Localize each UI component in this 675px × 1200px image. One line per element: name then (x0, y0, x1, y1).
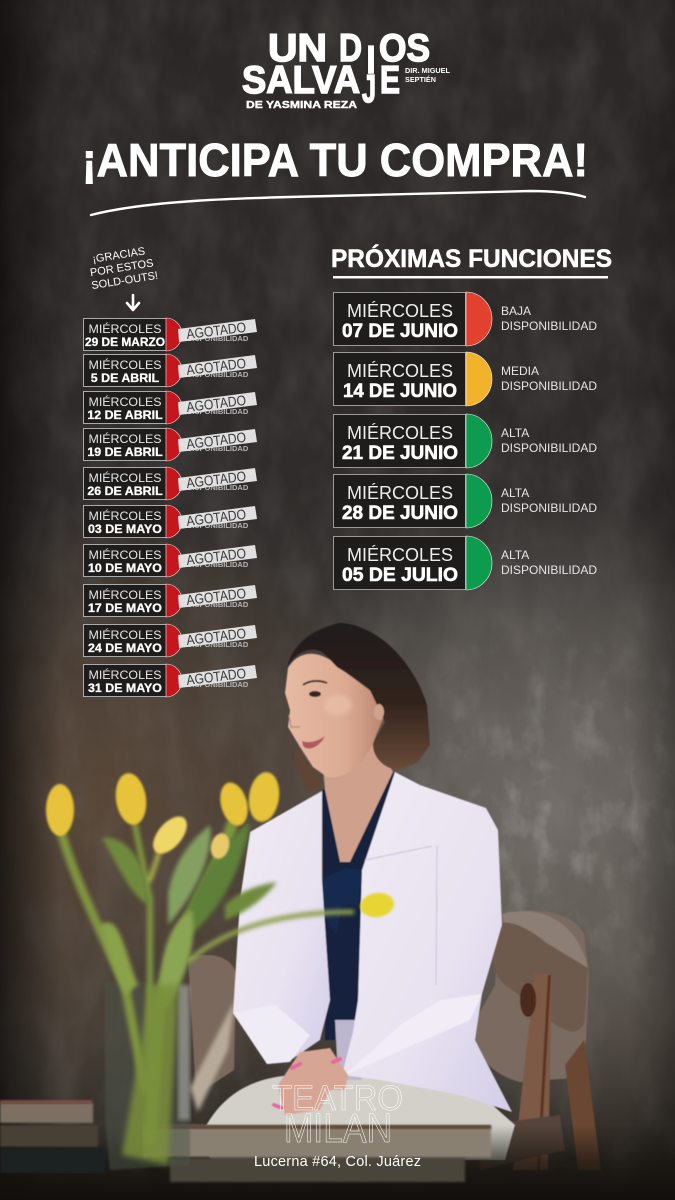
sold out date: 29 de marzo: AGOTADO (185, 319, 247, 342)
sold out date: 19 de abril: AGOTADO (185, 429, 247, 452)
sold out date: 24 de mayo: 24 DE MAYO (88, 641, 162, 655)
shirt (322, 772, 400, 1040)
upcoming date: 05 de julio, alta (334, 536, 597, 590)
upcoming date: 07 de junio, baja (334, 292, 597, 346)
trousers (205, 1072, 515, 1160)
sold out date: 26 de abril: DISPONIBILIDAD (187, 483, 249, 492)
sold out date: 10 de mayo (84, 544, 257, 577)
sold out date: 17 de mayo: DISPONIBILIDAD (187, 600, 249, 609)
sold out date: 26 de abril: 26 DE ABRIL (87, 484, 163, 498)
venue logo: Teatro Milan: MILAN (284, 1105, 392, 1151)
sold out date: 10 de mayo: DISPONIBILIDAD (187, 560, 249, 569)
sold out date: 31 de mayo (84, 664, 257, 697)
sold out date: 5 de abril: DISPONIBILIDAD (187, 370, 249, 379)
logo: Un Dios Salvaje: E (380, 59, 400, 102)
sold out date: 19 de abril: DISPONIBILIDAD (187, 444, 249, 453)
upcoming date: 05 de julio, alta: DISPONIBILIDAD (501, 563, 597, 577)
logo: Un Dios Salvaje (242, 27, 451, 111)
upcoming date: 05 de julio, alta: ALTA (501, 548, 529, 562)
upcoming date: 28 de junio, alta: 28 DE JUNIO (342, 502, 458, 524)
sold out date: 19 de abril: MIÉRCOLES (89, 431, 161, 446)
photo: tulips in vase (46, 770, 396, 1170)
logo: Un Dios Salvaje: OS (379, 27, 430, 70)
sold out date: 29 de marzo: MIÉRCOLES (89, 321, 161, 336)
sold out date: 26 de abril: MIÉRCOLES (89, 470, 161, 485)
sold out date: 03 de mayo: DISPONIBILIDAD (187, 521, 249, 530)
logo credit: director: SEPTIÉN (405, 75, 436, 84)
upcoming date: 21 de junio, alta (334, 414, 597, 468)
logo credit: author: DE YASMINA REZA (246, 99, 357, 111)
sold out date: 31 de mayo: MIÉRCOLES (89, 667, 161, 682)
sold out date: 12 de abril: MIÉRCOLES (89, 394, 161, 409)
upcoming date: 05 de julio, alta: MIÉRCOLES (347, 545, 453, 565)
upcoming date: 14 de junio, media (334, 352, 597, 406)
blooms (46, 770, 396, 919)
sold out date: 5 de abril: AGOTADO (185, 355, 247, 378)
thanks note: POR ESTOS (89, 257, 154, 279)
upcoming date: 07 de junio, baja: 07 DE JUNIO (342, 320, 458, 342)
sold out date: 5 de abril (84, 354, 257, 387)
upcoming date: 14 de junio, media: DISPONIBILIDAD (501, 379, 597, 393)
sold out date: 26 de abril: AGOTADO (185, 468, 247, 491)
logo: Un Dios Salvaje: SALVA (242, 59, 360, 102)
hands (278, 1048, 348, 1115)
photo: chair (188, 910, 601, 1170)
bow (310, 868, 362, 935)
sold out date: 31 de mayo: DISPONIBILIDAD (187, 680, 249, 689)
sold out date: 26 de abril (84, 467, 257, 500)
venue logo: Teatro Milan: TEATRO (272, 1079, 403, 1118)
sold out date: 12 de abril (84, 391, 257, 424)
sold out date: 19 de abril (84, 428, 257, 461)
face (285, 654, 386, 778)
sold out date: 5 de abril: 5 DE ABRIL (91, 371, 160, 385)
sold out date: 24 de mayo (84, 624, 257, 657)
thanks note: ¡GRACIAS (92, 245, 146, 266)
curl behind face (296, 745, 322, 790)
sold out date: 10 de mayo: AGOTADO (185, 545, 247, 568)
sold out date: 12 de abril: DISPONIBILIDAD (187, 407, 249, 416)
logo: Un Dios Salvaje: I (366, 39, 376, 82)
sold out date: 19 de abril: 19 DE ABRIL (87, 445, 163, 459)
sold out date: 12 de abril: 12 DE ABRIL (87, 408, 163, 422)
upcoming date: 21 de junio, alta: 21 DE JUNIO (342, 442, 458, 464)
hair (287, 623, 430, 770)
sold out date: 31 de mayo: AGOTADO (185, 665, 247, 688)
upcoming date: 07 de junio, baja: DISPONIBILIDAD (501, 319, 597, 333)
neck and chest (323, 740, 393, 862)
sold out date: 03 de mayo: 03 DE MAYO (88, 522, 162, 536)
heading underline (91, 191, 585, 215)
heading: ¡ANTICIPA TU COMPRA! (82, 134, 588, 186)
upcoming date: 14 de junio, media: 14 DE JUNIO (343, 380, 457, 402)
sold out date: 5 de abril: MIÉRCOLES (89, 357, 161, 372)
sold out date: 17 de mayo (84, 584, 257, 617)
logo: Un Dios Salvaje: D (339, 27, 362, 70)
sold out date: 17 de mayo: 17 DE MAYO (88, 601, 162, 615)
upcoming date: 14 de junio, media: MEDIA (501, 364, 539, 378)
icon: down arrow (127, 295, 139, 310)
sold out date: 10 de mayo: MIÉRCOLES (89, 547, 161, 562)
thanks note (87, 244, 159, 292)
logo credit: director (405, 66, 451, 84)
photo: woman (205, 623, 515, 1160)
sold out date: 17 de mayo: MIÉRCOLES (89, 587, 161, 602)
sold out date: 03 de mayo: MIÉRCOLES (89, 508, 161, 523)
sold out date: 31 de mayo: 31 DE MAYO (88, 681, 162, 695)
sold out date: 24 de mayo: AGOTADO (185, 625, 247, 648)
logo credit: director: DIR. MIGUEL (405, 66, 451, 75)
upcoming date: 21 de junio, alta: MIÉRCOLES (347, 423, 453, 443)
upcoming dates (334, 292, 597, 590)
logo: Un Dios Salvaje: J (362, 68, 376, 111)
sold out date: 29 de marzo: 29 DE MARZO (85, 335, 165, 349)
sold out list (84, 318, 257, 697)
upcoming date: 14 de junio, media: MIÉRCOLES (347, 361, 453, 381)
stems and leaves (62, 825, 352, 1140)
sold out date: 03 de mayo: AGOTADO (185, 506, 247, 529)
photo: bottom shade (0, 1125, 675, 1200)
sold out date: 24 de mayo: DISPONIBILIDAD (187, 640, 249, 649)
venue logo: Teatro Milan (272, 1079, 403, 1151)
sold out date: 29 de marzo: DISPONIBILIDAD (187, 334, 249, 343)
sold out date: 10 de mayo: 10 DE MAYO (88, 561, 162, 575)
sold out date: 17 de mayo: AGOTADO (185, 585, 247, 608)
sold out date: 03 de mayo (84, 505, 257, 538)
thanks note: SOLD-OUTS! (91, 270, 159, 292)
sold out date: 12 de abril: AGOTADO (185, 392, 247, 415)
upcoming date: 28 de junio, alta: ALTA (501, 486, 529, 500)
sold out date: 29 de marzo (84, 318, 257, 351)
jacket (233, 791, 330, 1064)
upcoming date: 21 de junio, alta: ALTA (501, 426, 529, 440)
sold out date: 24 de mayo: MIÉRCOLES (89, 627, 161, 642)
vase (105, 982, 190, 1170)
upcoming date: 21 de junio, alta: DISPONIBILIDAD (501, 441, 597, 455)
upcoming date: 07 de junio, baja: MIÉRCOLES (347, 301, 453, 321)
venue address: Lucerna #64, Col. Juárez (254, 1154, 421, 1170)
upcoming date: 28 de junio, alta (334, 474, 597, 528)
upcoming date: 07 de junio, baja: BAJA (501, 304, 531, 318)
upcoming date: 05 de julio, alta: 05 DE JULIO (342, 564, 458, 586)
photo: books and table (0, 1100, 491, 1182)
upcoming date: 28 de junio, alta: MIÉRCOLES (347, 483, 453, 503)
upcoming date: 28 de junio, alta: DISPONIBILIDAD (501, 501, 597, 515)
subheading: próximas funciones: PRÓXIMAS FUNCIONES (331, 243, 612, 273)
logo: Un Dios Salvaje: UN (268, 27, 327, 70)
